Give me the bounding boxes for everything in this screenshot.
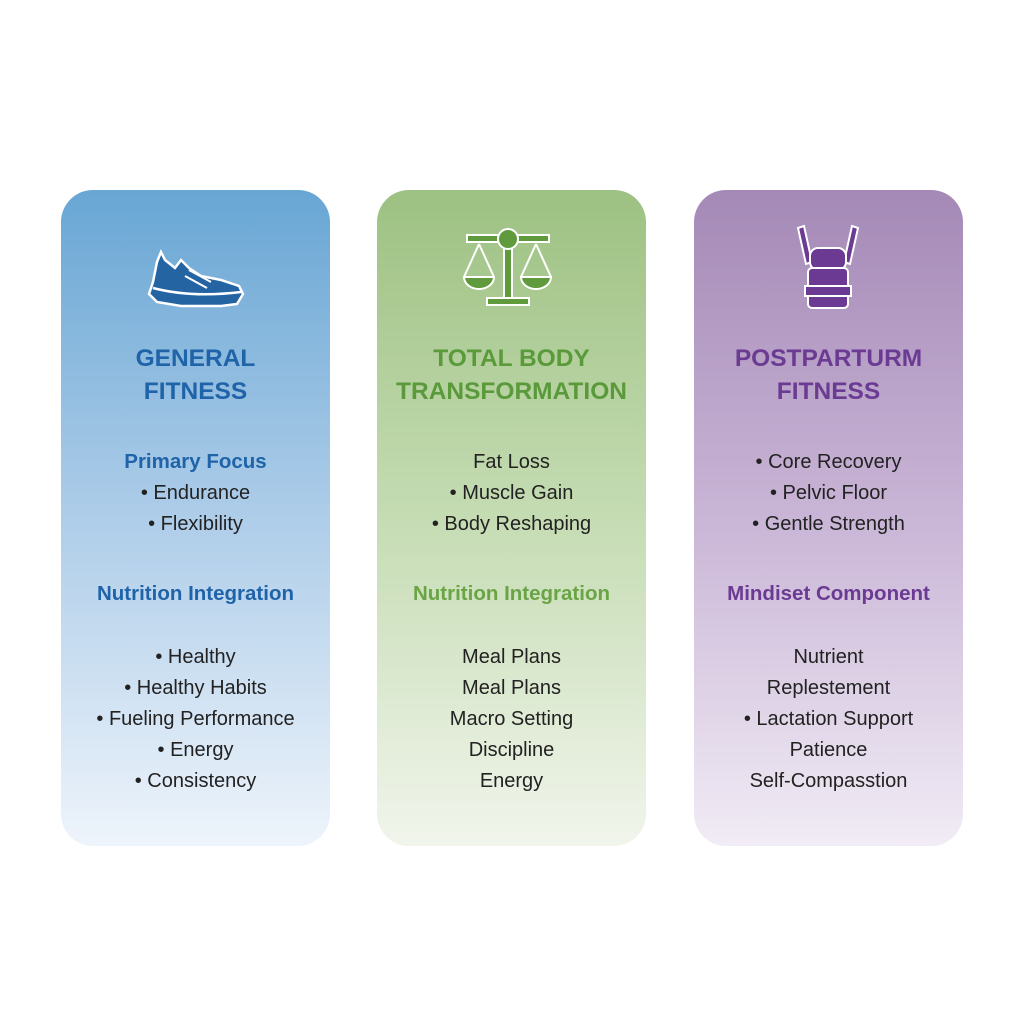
title: TRANSFORMATION <box>396 378 627 405</box>
list: nutrition: • Fueling Performance <box>96 708 295 730</box>
icon: shoe <box>148 249 244 308</box>
list: mindset: Self-Compasstion <box>750 770 907 792</box>
list: focus: • Pelvic Floor <box>770 482 887 504</box>
list: focus <box>141 482 250 535</box>
subheading: nutrition: Nutrition Integration <box>97 582 294 605</box>
list: mindset: Replestement <box>767 677 890 699</box>
title <box>396 345 627 405</box>
icon: scale <box>463 228 552 306</box>
list: nutrition <box>450 646 573 792</box>
list: focus <box>752 451 905 535</box>
list: goals: • Body Reshaping <box>432 513 591 535</box>
title: TOTAL BODY <box>433 345 590 372</box>
title: GENERAL <box>136 345 255 372</box>
title: FITNESS <box>777 378 880 405</box>
panel: total body transformation <box>377 190 646 846</box>
subheading: primary focus: Primary Focus <box>124 450 267 473</box>
list: nutrition: Meal Plans <box>462 677 561 699</box>
list: goals: • Muscle Gain <box>450 482 573 504</box>
title: POSTPARTURM <box>735 345 922 372</box>
list: goals: Fat Loss <box>473 451 550 473</box>
list: mindset <box>744 646 914 792</box>
title <box>735 345 922 405</box>
panel: general fitness <box>61 190 330 846</box>
panel: postpartum fitness <box>694 190 963 846</box>
list: mindset: • Lactation Support <box>744 708 913 730</box>
list: nutrition <box>96 646 295 792</box>
list: nutrition: Meal Plans <box>462 646 561 668</box>
list: focus: • Flexibility <box>148 513 243 535</box>
list: nutrition: • Healthy Habits <box>124 677 267 699</box>
list: nutrition: Macro Setting <box>450 708 573 730</box>
title: FITNESS <box>144 378 247 405</box>
list: goals <box>432 451 591 535</box>
list: nutrition: • Consistency <box>135 770 256 792</box>
list: nutrition: Energy <box>480 770 543 792</box>
list: focus: • Gentle Strength <box>752 513 905 535</box>
icon: baby carrier <box>796 224 860 309</box>
list: nutrition: Discipline <box>469 739 554 761</box>
list: focus: • Core Recovery <box>756 451 901 473</box>
subheading: mindset: Mindiset Component <box>727 582 930 605</box>
list: mindset: Patience <box>790 739 867 761</box>
subheading: nutrition: Nutrition Integration <box>413 582 610 605</box>
title <box>136 345 255 405</box>
list: mindset: Nutrient <box>793 646 864 668</box>
list: focus: • Endurance <box>141 482 250 504</box>
list: nutrition: • Energy <box>158 739 233 761</box>
list: nutrition: • Healthy <box>155 646 236 668</box>
